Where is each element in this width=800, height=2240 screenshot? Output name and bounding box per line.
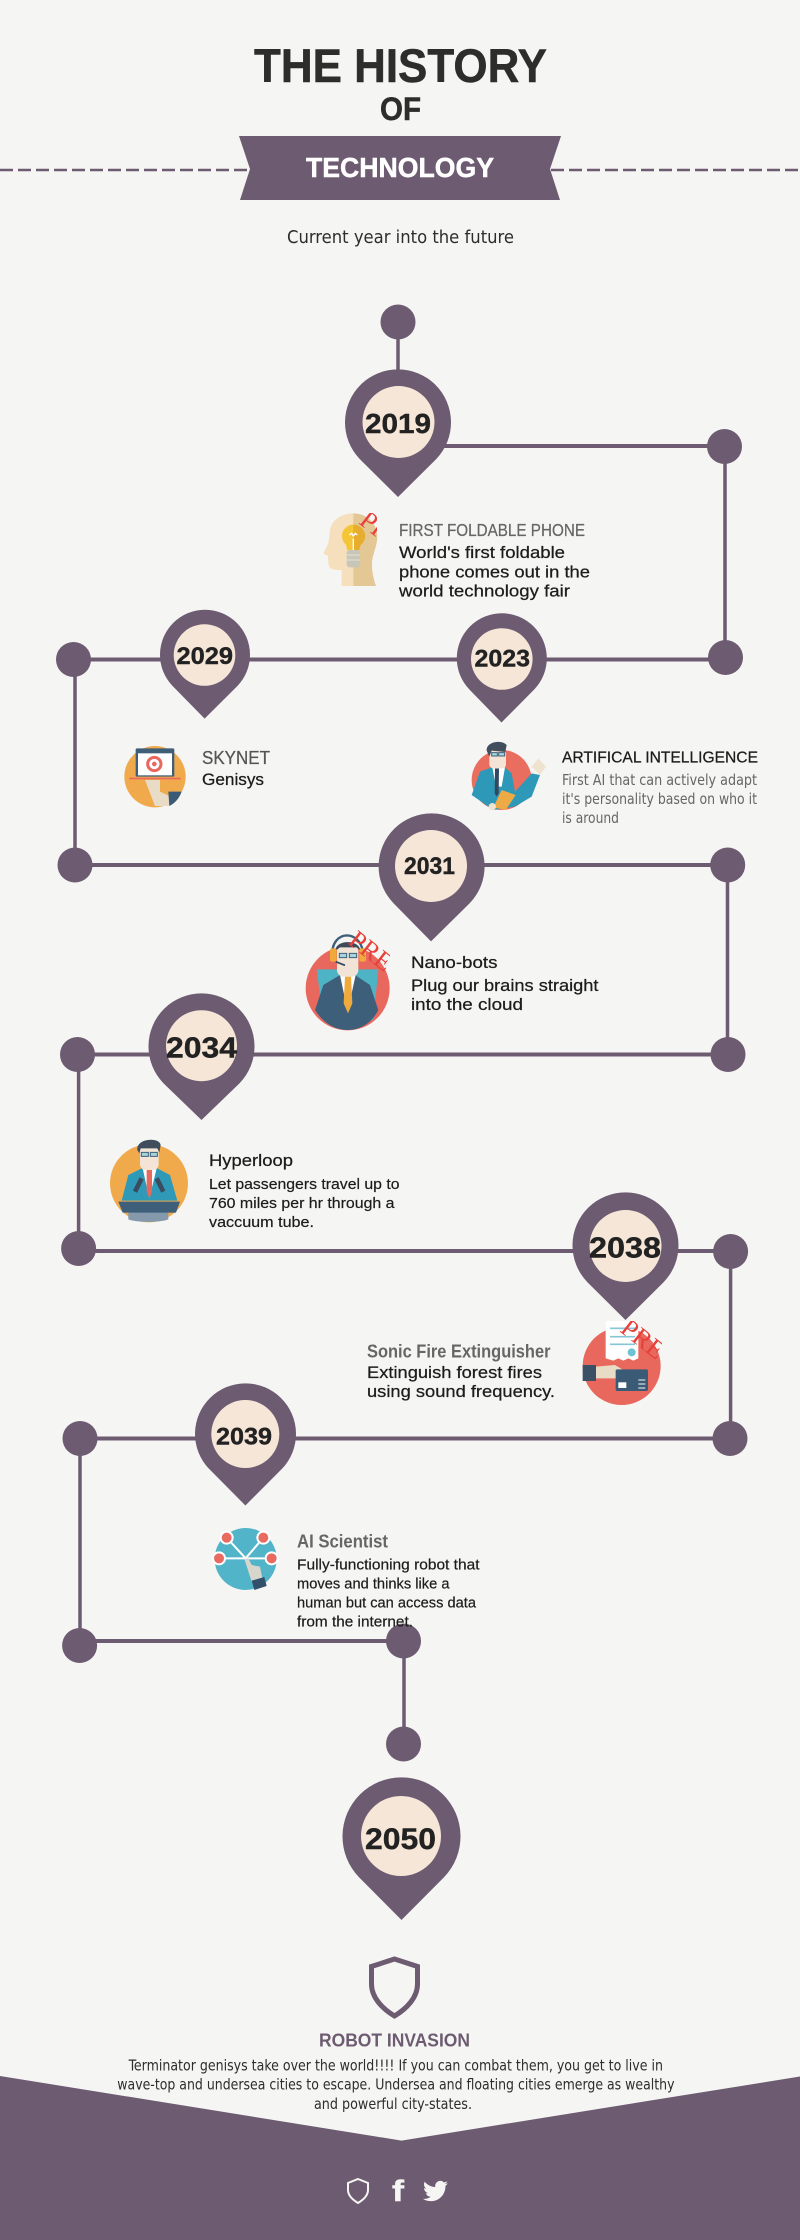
title line 1: THE HISTORY (254, 39, 547, 92)
pin 2050 (342, 1777, 460, 1920)
subtitle: Current year into the future (287, 227, 514, 248)
title (254, 39, 547, 127)
dashed line left (0, 169, 248, 171)
event heading: Nano-bots (411, 953, 498, 972)
event heading: FIRST FOLDABLE PHONE (399, 520, 585, 540)
event description: Let passengers travel up to (209, 1176, 400, 1193)
event description (367, 1363, 555, 1401)
pin 2031 (379, 813, 485, 941)
icon: network with pointing hand (213, 1528, 278, 1590)
pin 2031: 2031 (404, 853, 455, 880)
event description: Plug our brains straight (411, 976, 599, 995)
stamp: PRE (615, 1313, 671, 1365)
event: artificial intelligence (472, 742, 758, 827)
event: hyperloop (110, 1140, 400, 1231)
timeline nodes (56, 304, 748, 1762)
event description: into the cloud (411, 995, 523, 1014)
pin 2050: 2050 (365, 1823, 436, 1856)
conclusion text: and powerful city-states. (314, 2095, 472, 2113)
event description: vaccuum tube. (209, 1214, 314, 1231)
stamp: PR (354, 505, 398, 548)
pin 2038 (572, 1192, 678, 1320)
icon: twitter (423, 2181, 448, 2201)
conclusion text: Terminator genisys take over the world!!!! If you can combat them, you get to live in (128, 2056, 663, 2074)
conclusion text: wave-top and undersea cities to escape. Undersea and floating cities emerge as wealthy (117, 2076, 675, 2094)
pin 2023 (457, 613, 547, 722)
ribbon banner (239, 136, 561, 200)
event description: world technology fair (398, 582, 570, 600)
pin 2029: 2029 (176, 643, 233, 670)
event description: Fully-functioning robot that (297, 1558, 480, 1574)
event description: 760 miles per hr through a (209, 1195, 395, 1212)
icon: receipt and credit card (583, 1321, 661, 1405)
social icons (348, 2175, 448, 2208)
stamp: PRE (343, 925, 399, 977)
conclusion text (117, 2056, 675, 2113)
timeline path (73, 322, 731, 1744)
event description: moves and thinks like a (297, 1576, 450, 1592)
pin 2034 (148, 993, 254, 1120)
event: ai scientist (213, 1528, 480, 1631)
event: first foldable phone (323, 505, 590, 600)
event heading: Hyperloop (209, 1151, 293, 1170)
pin 2034: 2034 (166, 1033, 237, 1065)
event: sonic fire extinguisher (368, 1321, 662, 1405)
dashed line right (551, 169, 800, 171)
event description: from the internet. (297, 1615, 413, 1631)
icon: head with light bulb (323, 513, 377, 586)
conclusion heading: ROBOT INVASION (319, 2030, 470, 2050)
icon: businessman with folder (472, 742, 546, 810)
icon: speaker at podium (110, 1140, 188, 1222)
icon: shield outline (348, 2179, 368, 2203)
event description (411, 976, 599, 1014)
event description: human but can access data (297, 1596, 477, 1612)
pin 2023: 2023 (474, 645, 530, 672)
event description (562, 771, 757, 827)
event description: it's personality based on who it (562, 790, 757, 808)
event description (297, 1558, 480, 1631)
icon: facebook: f (392, 2175, 405, 2208)
banner text: TECHNOLOGY (306, 152, 494, 183)
event heading: Sonic Fire Extinguisher (367, 1342, 550, 1362)
event description (398, 543, 590, 600)
icon: hand holding laptop (124, 746, 186, 807)
event description: is around (562, 809, 619, 827)
event heading: ARTIFICAL INTELLIGENCE (562, 750, 758, 766)
event description: First AI that can actively adapt (562, 771, 757, 789)
event description: World's first foldable (399, 543, 565, 562)
footer band (0, 2076, 800, 2240)
event: skynet (124, 746, 270, 807)
icon: shield (372, 1959, 418, 2016)
title line 2: OF (380, 91, 421, 127)
event heading: AI Scientist (297, 1532, 388, 1552)
event description: Extinguish forest fires (367, 1363, 542, 1382)
pin 2039: 2039 (216, 1424, 272, 1450)
icon: man with headset (306, 935, 390, 1030)
event description: using sound frequency. (367, 1382, 555, 1401)
pin 2019 (345, 369, 451, 497)
event description: phone comes out in the (399, 562, 590, 582)
event heading: SKYNET (202, 747, 270, 768)
event description (209, 1176, 400, 1231)
pin 2039 (195, 1383, 296, 1506)
event description: Genisys (202, 771, 264, 789)
pin 2038: 2038 (589, 1232, 661, 1264)
event: nano-bots (306, 925, 599, 1030)
pin 2029 (160, 610, 250, 719)
pin 2019: 2019 (365, 408, 431, 439)
